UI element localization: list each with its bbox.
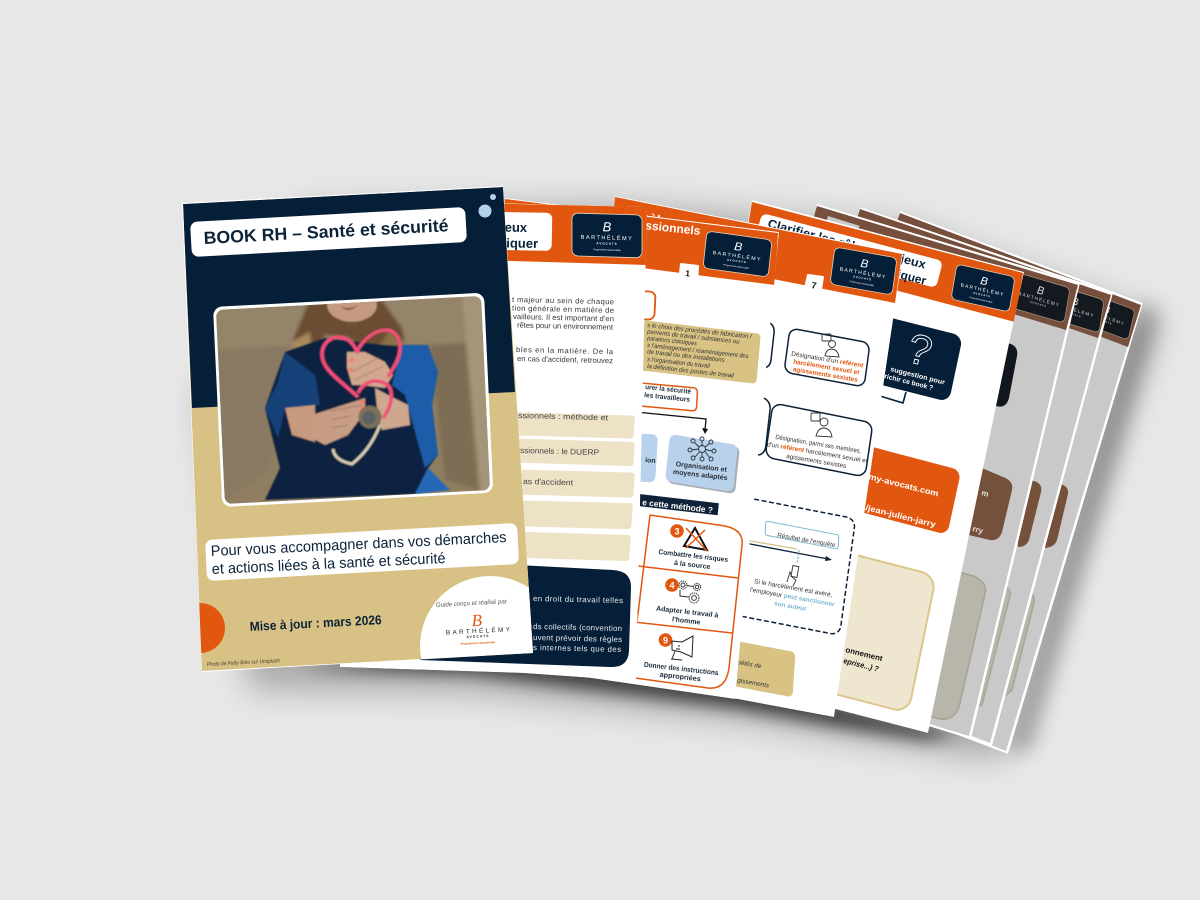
logo: page 7: B (1036, 284, 1045, 298)
text: contact (865, 475, 938, 528)
banner: cette méthode: e cette méthode ? (642, 497, 713, 515)
logo: page 5: Proprement raisonnable (849, 280, 875, 287)
row 4 (461, 499, 633, 529)
text: note (736, 659, 770, 690)
banner: cette méthode (604, 490, 719, 515)
title text (768, 220, 926, 284)
number: 7 (811, 280, 817, 291)
text: introduction: vailleurs. Il est important d'en (513, 312, 614, 323)
panel: dark box (996, 343, 1018, 407)
logo: page 4: BARTHÉLÉMY (712, 249, 762, 263)
logo: page 5: AVOCATS (853, 274, 872, 282)
panel: question box (883, 318, 962, 400)
text: navy note: uvent prévoir des règles (533, 633, 622, 644)
header band (340, 200, 647, 265)
text: organisation (673, 461, 728, 482)
subtitle: et actions liées à la santé et sécurité (211, 550, 446, 578)
header band (500, 199, 778, 285)
arrow: timeline (745, 543, 828, 559)
panel: navy note (420, 560, 631, 667)
left column box edges (766, 322, 775, 368)
logo: page 6 (951, 264, 1015, 312)
panel: tan list (638, 320, 761, 384)
logo: page 3: B (603, 219, 612, 235)
row 1: méthode (463, 411, 635, 439)
text: guide credit: Guide conçu et réalisé par (436, 598, 508, 609)
icon: gears (679, 581, 701, 603)
row 3: accident: as d'accident (523, 477, 574, 487)
title pill (190, 207, 467, 257)
text: box (644, 384, 691, 404)
logo: page 6: Proprement raisonnable (969, 296, 993, 304)
title text: Clarifier les enjeux (411, 218, 528, 235)
back page 7 (814, 204, 1080, 736)
text: card (791, 351, 865, 384)
number: 1 (685, 268, 691, 279)
card: blue partial (595, 431, 658, 483)
text: item 4: l'homme (672, 616, 701, 627)
stethoscope heart (322, 330, 400, 397)
text: introduction: t majeur au sein de chaque (512, 295, 614, 306)
row 3: accident (463, 468, 635, 498)
logo: page 4 (703, 231, 772, 277)
header title: professionnels (615, 215, 701, 238)
logo: page 8: AVOCATS (1064, 311, 1082, 319)
text: note: pétés de (736, 659, 762, 670)
photo: woman holding a stethoscope heart (205, 285, 500, 510)
title text: Clarifier les rôles et enjeux (766, 216, 928, 272)
update date: Mise à jour : mars 2026 (249, 612, 382, 634)
arrow: dotted (797, 550, 799, 564)
header band (744, 202, 1023, 322)
header title: Harcèlement sexuel (619, 205, 742, 243)
text: card: Désignation, parmi ses membres, (775, 434, 862, 455)
page 3: enjeux, sommaire (340, 199, 647, 681)
item 4: 4 (669, 580, 675, 590)
text: item 9: Donner des instructions (644, 660, 719, 677)
logo: page 8: B (1071, 295, 1079, 309)
photo credit: Photo de Patty Brito sur Unsplash (207, 658, 280, 668)
title pill (411, 211, 552, 251)
text: navy note (533, 594, 623, 654)
text: contact: my-avocats.com (868, 471, 940, 498)
page number tab (679, 264, 698, 285)
text: card: harcèlement sexuel et (793, 359, 861, 377)
lower hand (312, 398, 365, 445)
panel: tan box (837, 554, 934, 711)
logo: page 9: AVOCATS (1096, 317, 1112, 326)
logo: page 4: AVOCATS (727, 258, 747, 264)
text: navy note: en droit du travail telles (533, 594, 623, 605)
panel: orange contact box (864, 447, 960, 533)
icon: people (811, 413, 832, 437)
text: question: suggestion pour (890, 366, 946, 387)
text: box: urer la sécurité (645, 384, 691, 396)
text: tan list (646, 322, 753, 380)
logo: cover (446, 611, 511, 646)
logo: page 8: BARTHÉLÉMY (1053, 300, 1095, 319)
text: introduction (512, 295, 614, 365)
logo: page 3: Proprement raisonnable (593, 247, 621, 252)
box: résultat de l'enquête: Résultat de l'enquête (777, 532, 836, 549)
panel: grey box (931, 572, 986, 720)
logo: cover: B (471, 611, 483, 630)
card: organisation et moyens adaptés (665, 434, 740, 494)
item 3 (658, 524, 728, 571)
text: sanction: l'employeur peut sanctionner (749, 587, 836, 609)
back page 8 (858, 207, 1113, 746)
text: item 4 (656, 605, 719, 627)
row 2: DUERP (463, 437, 635, 466)
card: référent (784, 328, 870, 387)
page 5: Harcèlement sexuel (614, 196, 903, 717)
icon: warning crossed (684, 528, 707, 551)
icon: question mark: ? (903, 324, 937, 375)
small circles (478, 194, 496, 218)
text: tan list: la définition des postes de travail (647, 363, 735, 380)
icon: person (822, 334, 839, 357)
logo: page 7: BARTHÉLÉMY (1018, 290, 1061, 308)
panel: grey sliver (1005, 594, 1035, 696)
logo: page 5: BARTHÉLÉMY (839, 265, 887, 281)
face (327, 288, 377, 322)
item 9 (644, 633, 719, 683)
stethoscope tube (333, 425, 380, 464)
text: contact: /jean-julien-jarry (865, 502, 937, 529)
text: tan list: s le choix des procédés de fabrication / (647, 322, 753, 341)
panel: orange frame list (620, 515, 742, 688)
arrow: tan timeline (745, 540, 797, 549)
icon: hand with phone (787, 566, 799, 586)
drop shadow of the page fan (200, 205, 1160, 760)
logo: page 6: B (979, 275, 989, 288)
page number tab (804, 274, 824, 289)
text: contact fragments: rry (971, 524, 985, 536)
logo: page 4: B (734, 239, 743, 254)
logo: page 3 (572, 213, 642, 258)
text: tan list: s l'aménagement / réaménagement des (647, 342, 750, 360)
text: question: richir ce book ? (884, 373, 934, 392)
text: card (766, 434, 868, 470)
text: sanction: son auteur (774, 600, 807, 613)
item 4 (656, 578, 719, 627)
panel: tan note (707, 636, 796, 697)
shirt (265, 338, 448, 500)
text: tan list: pements de travail / substances ou (646, 328, 740, 346)
text: navy note: s internes tels que des (533, 643, 621, 654)
text: introduction: tion générale en matière de (512, 304, 614, 315)
chest piece (358, 406, 382, 428)
text: card: agissements sexistes (792, 366, 859, 384)
text: item 9: appropriées (659, 670, 701, 683)
text: organisation: moyens adaptés (673, 469, 728, 482)
logo: page 7: AVOCATS (1030, 301, 1047, 308)
text: note: gissements (737, 677, 770, 690)
row 2: DUERP: ssionnels : le DUERP (520, 446, 599, 457)
logo: page 4: Proprement raisonnable (723, 264, 750, 270)
text: organisation: Organisation et (675, 461, 728, 474)
panel: grey sliver (978, 587, 1011, 708)
nails (348, 358, 365, 410)
logo: page 9: B (1102, 304, 1112, 317)
orange circle (175, 603, 225, 653)
text: item 3: Combattre les risques (658, 549, 728, 564)
text: question (884, 368, 946, 390)
logo: page 9 (1102, 301, 1134, 339)
subtitle pill (205, 523, 519, 581)
item 9: 9 (663, 636, 668, 646)
title text: à pratiquer (864, 259, 928, 288)
arms (285, 405, 315, 442)
icon: network (688, 437, 716, 461)
page 6: Clarifier les enjeux (748, 200, 1024, 733)
card: référent parmi les membres (765, 403, 873, 477)
logo: page 5 (830, 247, 897, 295)
pill: page 7 title (826, 216, 860, 228)
icon: megaphone (671, 636, 693, 660)
text: card: Désignation d'un référent (791, 351, 865, 370)
logo: cover: AVOCATS (466, 634, 490, 639)
white logo circle (420, 576, 560, 716)
title pill (755, 213, 943, 288)
text: sanction (749, 578, 836, 613)
logo: cover: BARTHÉLÉMY (446, 624, 511, 637)
text: contact fragments (972, 491, 988, 535)
subtitle: Pour vous accompagner dans vos démarches (210, 529, 507, 560)
connector under question box (880, 392, 906, 403)
logo: page 9: BARTHÉLÉMY (1085, 307, 1125, 326)
text: box: les travailleurs (644, 392, 690, 404)
text: contact fragments: m (980, 488, 990, 499)
text: introduction: rêtes pour un environnement (517, 321, 614, 332)
text: item 3 (658, 549, 728, 571)
arrow: connector (636, 412, 708, 434)
logo: page 5: B (860, 257, 869, 271)
text: card: d'un référent harcèlement sexuel et (766, 441, 868, 465)
logo: page 3: AVOCATS (596, 241, 618, 246)
text: introduction: bles en la matière. De la (516, 345, 614, 356)
text: question in tan box: eprise...) ? (843, 656, 880, 674)
logo: page 6: AVOCATS (973, 292, 991, 298)
text: sanction: Si le harcèlement est avéré, (754, 578, 833, 599)
row 5 (459, 530, 631, 561)
text: tan list: s l'organisation du travail (647, 356, 711, 370)
page 4: risques professionnels (461, 198, 779, 699)
text: tan list: de travail ou des installations (647, 349, 726, 364)
header band (610, 197, 902, 303)
title text (411, 218, 538, 251)
logo: cover: Proprement raisonnable (461, 640, 496, 646)
panel: brown contact box (969, 468, 1012, 540)
back page 9 (898, 211, 1143, 754)
dashed panel: enquête (722, 496, 856, 635)
title text: à pratiquer (471, 235, 538, 251)
logo: page 6: BARTHÉLÉMY (960, 282, 1005, 298)
upper hand (347, 352, 393, 388)
row 1: méthode: ssionnels : méthode et (518, 411, 609, 422)
sofa and wall tones (205, 285, 500, 350)
subtitle (210, 529, 507, 578)
cover page (175, 186, 560, 716)
item 3: 3 (674, 526, 680, 536)
text: question in tan box (844, 648, 883, 672)
text: navy note: ds collectifs (convention (533, 622, 622, 633)
panel: brown sliver (1018, 480, 1041, 547)
text: ion (645, 457, 656, 465)
cover background (175, 187, 560, 716)
logo: page 8 (1070, 292, 1104, 332)
text: question in tan box: onnement (845, 645, 884, 663)
box: assurer la sécurité (607, 380, 698, 411)
panel: brown sliver (1045, 484, 1068, 548)
photo frame (213, 293, 493, 507)
text: item 4: Adapter le travail à (656, 605, 719, 620)
hair (292, 300, 405, 367)
text: card: agissements sexistes (786, 453, 847, 470)
logo: page 7 (1016, 274, 1070, 322)
title: BOOK RH – Santé et sécurité (203, 215, 449, 248)
text: tan list: parations chimiques (646, 335, 698, 348)
text: item 3: à la source (674, 560, 711, 571)
pill: orange outline (589, 288, 656, 320)
text: introduction: en cas d'accident, retrouvez (517, 354, 613, 365)
logo: page 3: BARTHÉLÉMY (581, 234, 633, 242)
